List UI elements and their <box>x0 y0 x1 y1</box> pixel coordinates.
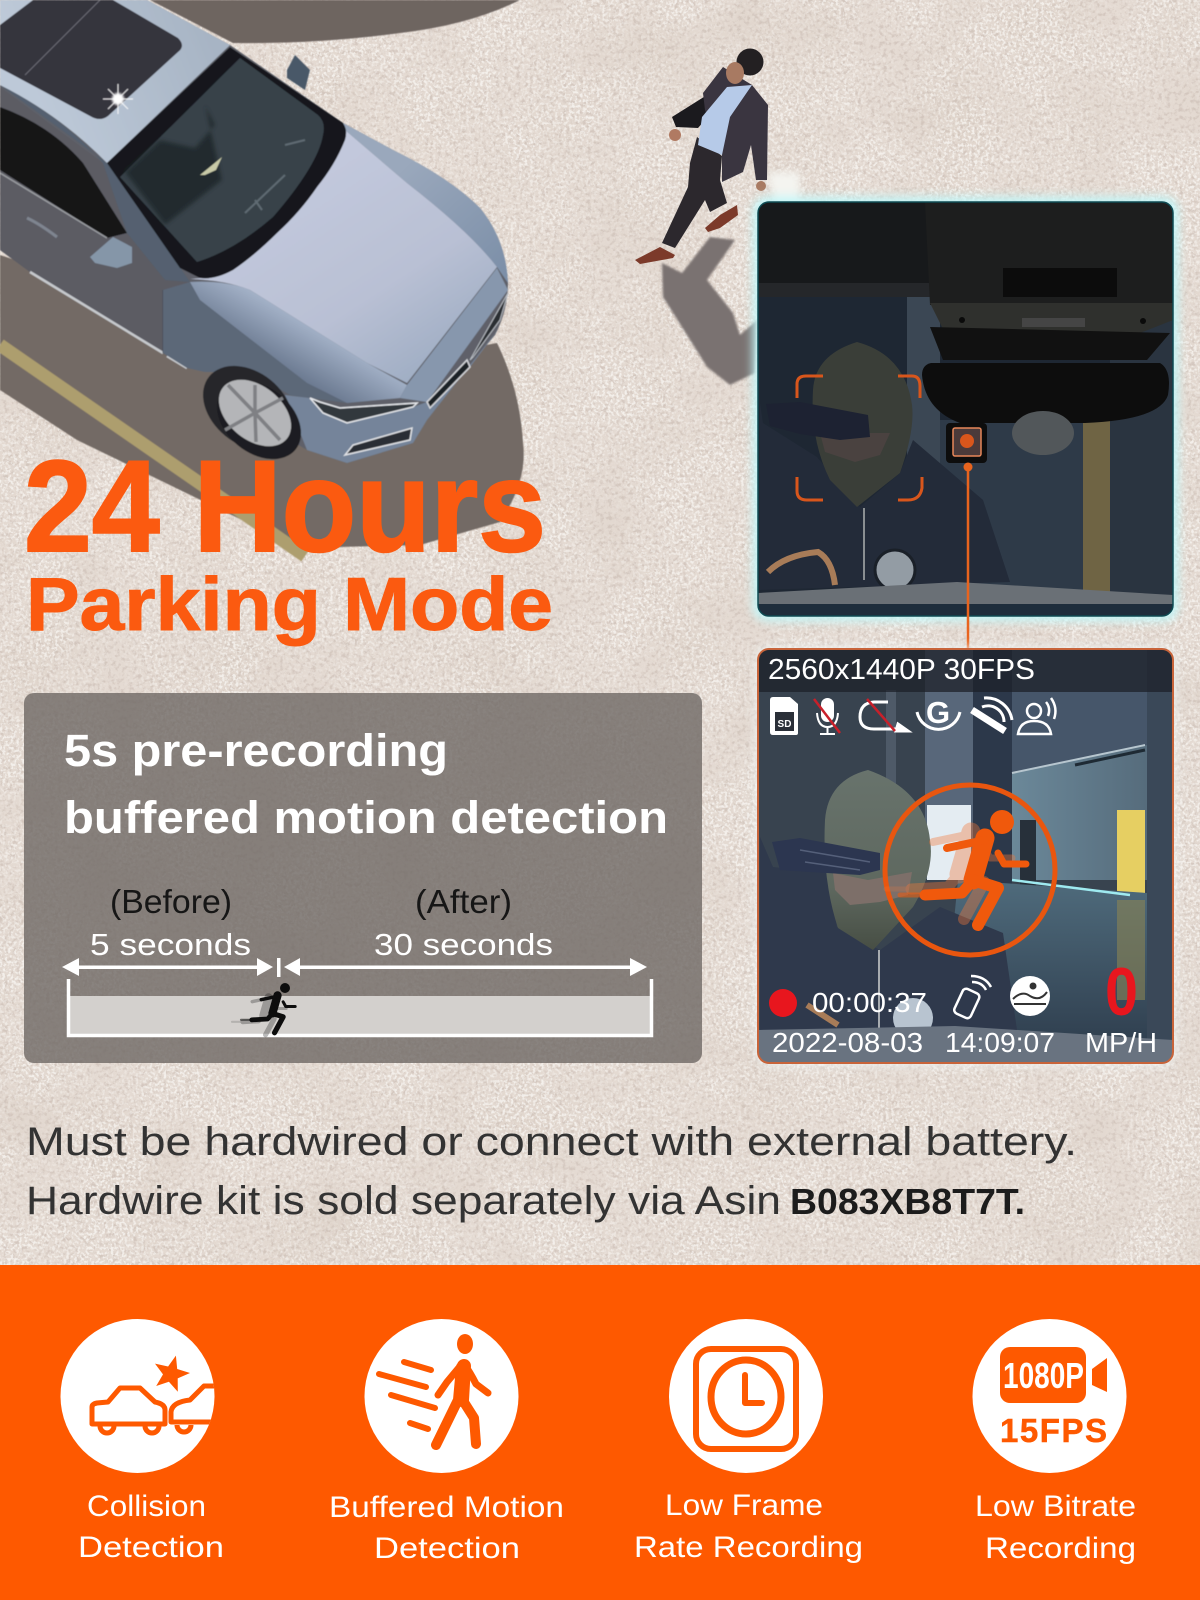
note: hardwire requirement: B083XB8T7T. <box>790 1181 1025 1222</box>
thief silhouette <box>760 770 1017 1040</box>
car: grille <box>427 360 470 408</box>
icon: G-sensor <box>917 695 960 730</box>
label: after: (After) <box>415 883 512 920</box>
label: Detection <box>78 1531 224 1564</box>
icon: remote signal <box>953 976 991 1019</box>
icon: collision status <box>1010 976 1050 1016</box>
car: mirrors <box>90 237 132 268</box>
feature: low bitrate recording <box>972 1319 1144 1565</box>
icon: running figure on timeline <box>232 983 295 1035</box>
photo: walking man with shadow <box>635 48 800 385</box>
icon: SD card <box>770 697 798 735</box>
timeline bar <box>68 979 652 1036</box>
car: right fender <box>343 123 508 283</box>
feature: low frame rate recording <box>634 1319 863 1564</box>
connector line between panels <box>964 462 972 650</box>
icon: motion detection circle <box>885 785 1055 955</box>
arrow: after span <box>277 958 647 977</box>
feature: buffered motion detection <box>329 1319 572 1565</box>
arrow: before span <box>62 958 273 976</box>
label: Collision <box>87 1490 206 1523</box>
car: headlight <box>310 398 417 423</box>
icon: GPS satellite <box>972 698 1012 731</box>
car: front fender <box>163 282 347 403</box>
car: front wheel <box>186 349 310 467</box>
footer band: features <box>0 1265 1200 1600</box>
subtitle line: Parking Mode: Parking Mode <box>26 562 553 646</box>
icon: muted microphone <box>814 698 840 734</box>
note: hardwire requirement: Hardwire kit is sold separately via Asin <box>26 1179 781 1223</box>
label: 30 seconds: 30 seconds <box>374 927 553 962</box>
icon: G-sensor: G <box>926 695 950 730</box>
resolution readout: 2560x1440P 30FPS <box>768 654 1035 686</box>
thief silhouette <box>760 342 1010 590</box>
title <box>24 433 553 646</box>
title line: 24 Hours: 24 Hours <box>24 433 546 579</box>
label: Low Frame <box>665 1489 823 1522</box>
car: bumper <box>285 327 500 463</box>
label: Low Bitrate <box>975 1490 1136 1523</box>
speed value: 0 <box>1105 954 1138 1030</box>
car: side door <box>0 87 190 353</box>
icon: voice person <box>1018 698 1055 734</box>
car: roof <box>0 0 230 163</box>
note: hardwire requirement <box>26 1120 1077 1223</box>
label: 5 seconds: 5 seconds <box>90 927 251 962</box>
label: Detection <box>374 1532 520 1565</box>
date: 2022-08-03 <box>772 1027 923 1058</box>
speed unit: MP/H <box>1085 1027 1157 1058</box>
photo: parked car with shadows <box>0 0 524 556</box>
recording indicator <box>769 989 797 1017</box>
time: 14:09:07 <box>945 1027 1055 1058</box>
icon: clock in frame <box>696 1349 796 1449</box>
icon: loop recording off <box>860 699 908 731</box>
note: hardwire requirement: Must be hardwired or connect with external battery. <box>26 1120 1077 1164</box>
icon: 15FPS: 15FPS <box>1000 1412 1107 1449</box>
label: Buffered Motion <box>329 1491 564 1524</box>
feature: collision detection <box>60 1319 224 1564</box>
panel: camera screen recording <box>756 647 1175 1065</box>
background: concrete ground <box>0 0 1200 1270</box>
car: windshield <box>107 47 346 278</box>
focus brackets <box>797 376 922 500</box>
panel: in-car photo with thief <box>753 197 1178 621</box>
heading: buffered motion detection: buffered motion detection <box>64 792 668 843</box>
icon: walking person <box>379 1334 488 1445</box>
panel: buffered motion detection <box>24 693 702 1063</box>
icon: dash camera <box>946 423 987 463</box>
icon: SD card: SD <box>778 719 791 730</box>
car: hood <box>190 130 497 383</box>
icon: collision cars <box>92 1356 214 1433</box>
label: Recording <box>985 1532 1136 1565</box>
recording timer: 00:00:37 <box>812 987 927 1018</box>
heading: 5s pre-recording: 5s pre-recording <box>64 725 448 776</box>
label: before: (Before) <box>110 883 232 920</box>
icon: 1080P video badge: 1080P <box>1003 1355 1084 1396</box>
label: Rate Recording <box>634 1531 863 1564</box>
